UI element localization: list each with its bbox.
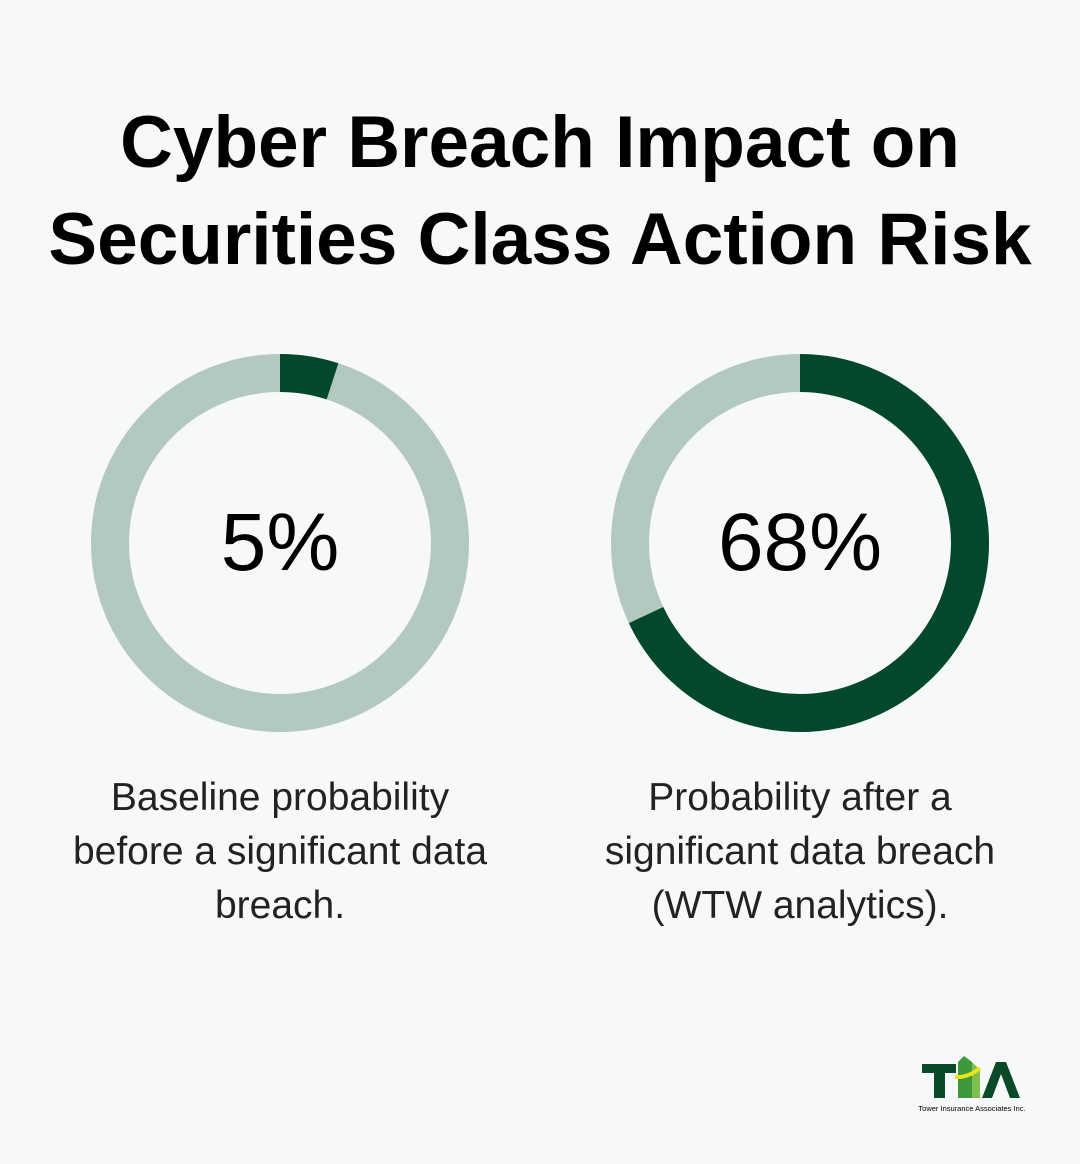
caption: after breach: significant data breach — [605, 830, 995, 873]
title: Cyber Breach Impact on — [120, 102, 960, 183]
logo — [918, 1056, 1026, 1113]
caption: baseline: before a significant data — [73, 830, 487, 873]
caption: after breach — [605, 776, 995, 927]
caption: after breach: Probability after a — [648, 776, 952, 819]
title — [48, 102, 1032, 280]
donut: 5%: 5% — [221, 497, 339, 588]
caption: baseline: breach. — [215, 884, 345, 927]
donut: 68%: 68% — [718, 497, 882, 588]
caption: baseline: Baseline probability — [111, 776, 449, 819]
logo: Tower Insurance Associates Inc. — [918, 1104, 1026, 1113]
caption: baseline — [73, 776, 488, 927]
caption: after breach: (WTW analytics). — [652, 884, 948, 927]
title: Securities Class Action Risk — [48, 199, 1032, 280]
donut: 5% — [110, 373, 450, 713]
donut: 68% — [630, 373, 970, 713]
